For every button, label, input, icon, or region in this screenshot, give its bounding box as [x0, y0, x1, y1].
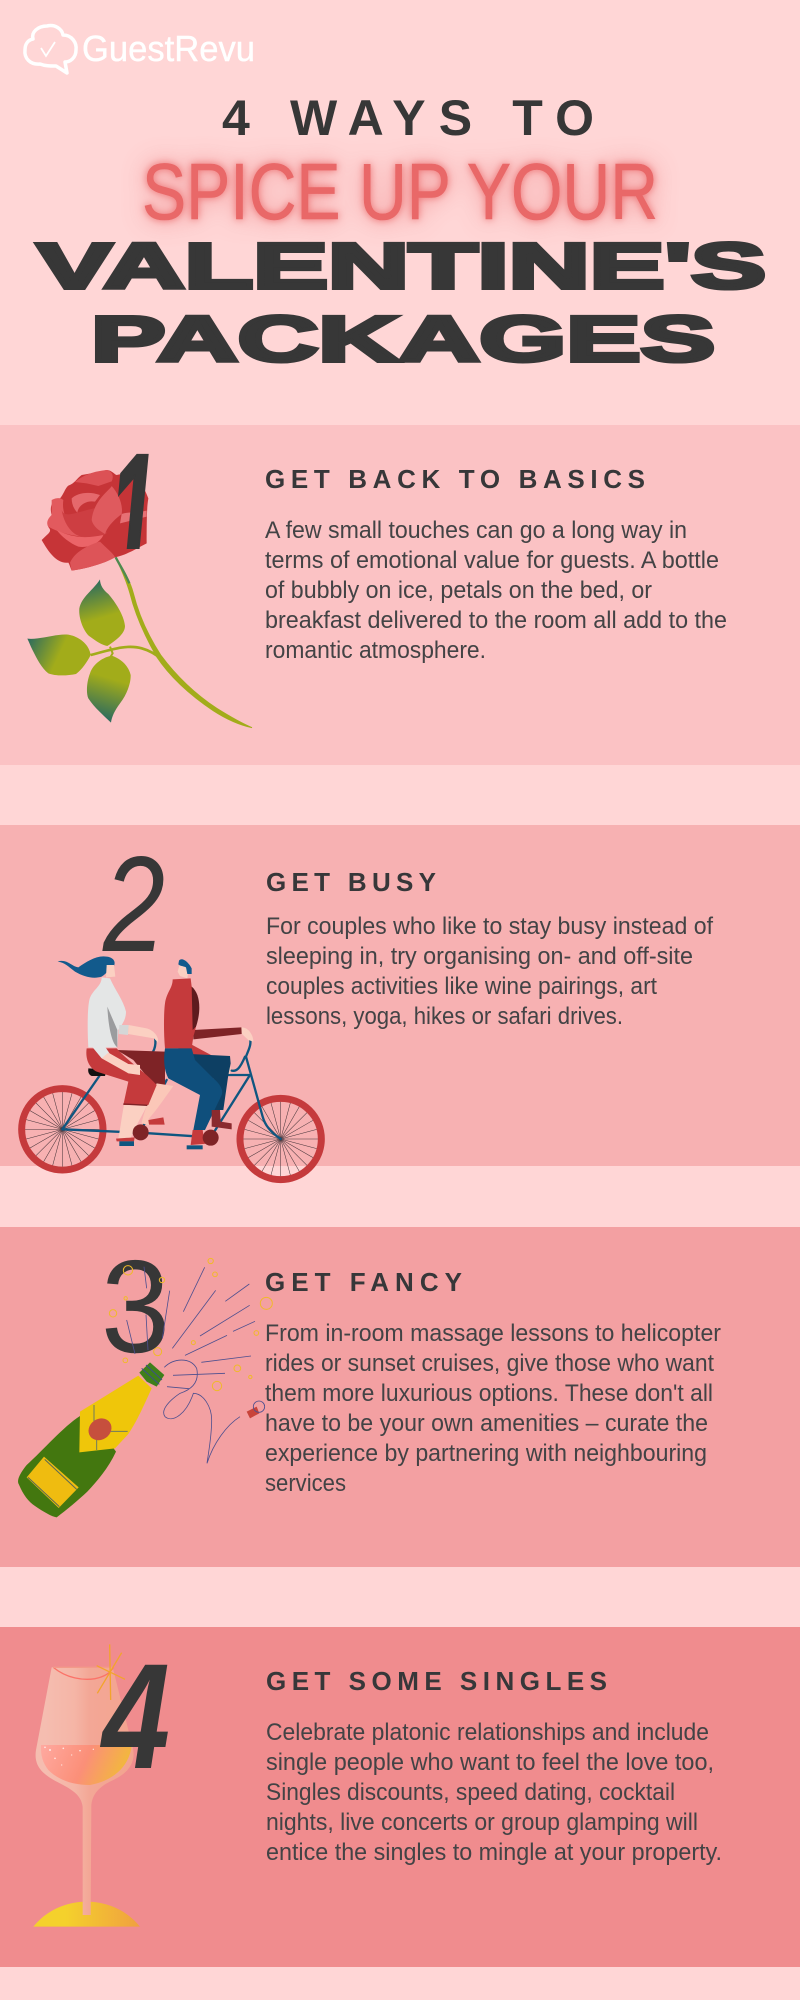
title	[37, 90, 766, 375]
title line: spice up your: SPICE UP YOUR	[142, 147, 658, 236]
body text: sleeping in, try organising on- and off-site	[266, 943, 693, 970]
body text: single people who want to feel the love too,	[266, 1749, 714, 1776]
body text	[266, 1719, 722, 1866]
body text: nights, live concerts or group glamping will	[266, 1809, 698, 1836]
body text: Celebrate platonic relationships and include	[266, 1719, 709, 1746]
pedals	[133, 1124, 219, 1146]
body text: rides or sunset cruises, give those who want	[265, 1350, 714, 1377]
wheels	[22, 1089, 321, 1180]
number 4: 4	[100, 1632, 170, 1800]
man	[164, 959, 253, 1149]
body text: entice the singles to mingle at your property.	[266, 1839, 722, 1866]
body text	[265, 1320, 721, 1497]
illustration: wine glass	[33, 1644, 140, 1927]
streamers	[127, 1267, 255, 1463]
body text: have to be your own amenities – curate the	[265, 1410, 708, 1437]
number 2: 2	[102, 828, 165, 980]
logo: GuestRevu	[25, 26, 255, 73]
body text: of bubbly on ice, petals on the bed, or	[265, 577, 652, 604]
body text	[266, 913, 713, 1030]
icon: speech cloud with check	[25, 26, 76, 73]
body text	[265, 517, 727, 664]
panel: get some singles	[0, 1627, 800, 1967]
title line: packages: PACKAGES	[91, 303, 715, 375]
heading: GET BACK TO BASICS	[265, 464, 645, 494]
heading: GET BUSY	[266, 867, 436, 897]
body text: Singles discounts, speed dating, cocktail	[266, 1779, 675, 1806]
body text: romantic atmosphere.	[265, 637, 486, 664]
bubbles	[109, 1258, 272, 1391]
bottle	[18, 1362, 164, 1517]
illustration: couple on tandem bicycle	[22, 956, 321, 1180]
body text: From in-room massage lessons to helicopter	[265, 1320, 721, 1347]
body text: services	[265, 1470, 346, 1497]
logo wordmark: GuestRevu	[82, 28, 255, 69]
body text: experience by partnering with neighbouring	[265, 1440, 707, 1467]
woman	[58, 956, 173, 1146]
bicycle frame	[62, 1037, 281, 1139]
body text: terms of emotional value for guests. A bottle	[265, 547, 719, 574]
panel: get back to basics: 1	[110, 419, 156, 607]
heading: GET SOME SINGLES	[266, 1666, 607, 1696]
panel: get busy	[0, 825, 800, 1180]
body text: For couples who like to stay busy instead of	[266, 913, 713, 940]
panel: get fancy	[0, 1227, 800, 1567]
heading: GET FANCY	[265, 1267, 462, 1297]
cork	[247, 1401, 265, 1418]
panel: get back to basics	[0, 419, 800, 765]
title line: valentine's: VALENTINE'S	[37, 230, 766, 302]
body text: lessons, yoga, hikes or safari drives.	[266, 1003, 623, 1030]
title line: 4 ways to: 4 WAYS TO	[222, 90, 594, 146]
icon: rose	[27, 470, 252, 728]
number 3: 3	[101, 1233, 170, 1380]
body text: them more luxurious options. These don't all	[265, 1380, 713, 1407]
illustration: champagne bottle	[18, 1258, 272, 1517]
body text: A few small touches can go a long way in	[265, 517, 687, 544]
body text: breakfast delivered to the room all add to the	[265, 607, 727, 634]
body text: couples activities like wine pairings, art	[266, 973, 657, 1000]
